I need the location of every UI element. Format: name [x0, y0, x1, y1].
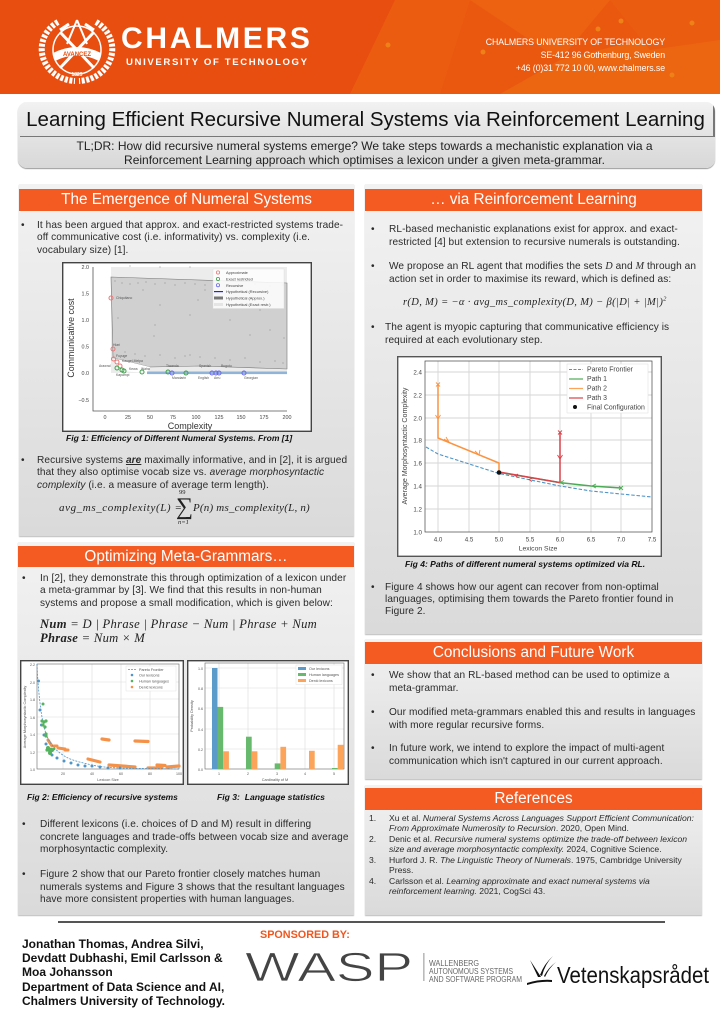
chart: Fig 2 scatter: 2.0	[30, 681, 35, 685]
chart: efficiency of numeral systems: 25	[125, 415, 131, 421]
panel: Conclusions and Future Work	[365, 639, 702, 779]
formula: average ms complexity: n=1	[178, 519, 189, 526]
icon: Chalmers crest: 1829	[71, 72, 83, 78]
text block: meta-grammar: •	[22, 573, 26, 584]
text block: Pareto frontier: Figure 2 show that our Pareto frontier closely matches human	[40, 869, 320, 880]
chart: Fig 4 paths: Average Morphosyntactic Complexity	[401, 387, 409, 504]
text block: trade-off: •	[21, 220, 25, 231]
reference 4: Carlsson et al. Learning approximate and exact numeral systems via	[389, 876, 650, 886]
chart: efficiency of numeral systems: 125	[214, 415, 224, 421]
chart: efficiency of numeral systems: English	[198, 376, 209, 380]
chart: Fig 4 paths: 1.0	[413, 530, 423, 536]
chart: efficiency of numeral systems: 0.5	[82, 344, 89, 350]
formula: average ms complexity: 99	[179, 489, 186, 496]
authors and affiliation: Department of Data Science and AI,	[22, 980, 224, 994]
reference 4: reinforcement learning. 2021, CogSci 43.	[389, 886, 545, 896]
text block: different lexicons: •	[22, 819, 26, 830]
chart: Fig 4 paths: 5.0	[495, 536, 504, 544]
title: Learning Efficient Recursive Numeral Systems via Reinforcement Learning	[26, 108, 705, 131]
chart: efficiency of numeral systems: 50	[147, 415, 153, 421]
chart: efficiency of numeral systems: 100	[192, 415, 200, 421]
text block: Figure 4: •	[371, 582, 375, 593]
chart: Fig 2 scatter: 1.8	[30, 698, 35, 702]
chart: efficiency of numeral systems: Spanish	[199, 364, 211, 368]
chart: Fig 2 scatter: Denić lexicons	[139, 686, 163, 690]
panel: The Emergence of Numeral Systems	[19, 184, 354, 536]
panel: References	[365, 785, 702, 915]
text block: conclusion two: Our modified meta-grammars enabled this and results in languages	[389, 707, 695, 718]
logo wordmark: CHALMERS	[121, 22, 313, 55]
text block: conclusion three: •	[371, 743, 375, 754]
text block: Pareto frontier: •	[22, 869, 26, 880]
chart: Fig 4 paths: 1.8	[413, 438, 423, 444]
reference 1: Xu et al. Numeral Systems Across Languages Support Efficient Communication:	[389, 813, 694, 823]
chart: Fig 2 scatter: 100	[176, 772, 182, 776]
chart: Fig 4 paths: 2.4	[413, 370, 423, 376]
chart: Fig 3 bars: 3	[276, 772, 278, 776]
chart: efficiency of numeral systems: Kewa	[129, 367, 138, 371]
chart: Fig 2 scatter: 1.2	[30, 751, 35, 755]
text block: meta-grammar	[22, 573, 346, 609]
text block: myopic agent: required at each evolutionary step.	[385, 335, 543, 346]
caption: Fig 3: Fig 3: Language statistics	[217, 792, 325, 802]
text block: Figure 4: languages, optimising them towards the Pareto frontier found in	[385, 594, 673, 605]
chart: Fig 3 bars: 0.8	[198, 687, 203, 691]
text block: Pareto frontier: numerals systems and Figure 3 shows that the resultant languages	[40, 882, 345, 892]
chart: efficiency of numeral systems: Hiari	[113, 343, 120, 347]
authors and affiliation: Jonathan Thomas, Andrea Silvi,	[22, 936, 204, 950]
formula: average ms complexity: avg_ms_complexity(L) =	[59, 502, 183, 514]
text block: recursive systems: complexity (i.e. a measure of average term length).	[37, 480, 269, 491]
chart: efficiency of numeral systems: 1.0	[82, 318, 89, 324]
chart: efficiency of numeral systems: Waha	[141, 367, 150, 371]
chart: Fig 3 bars: 1.0	[198, 667, 203, 671]
text block: Figure 4: Figure 2.	[385, 606, 426, 617]
text block: myopic agent	[371, 322, 669, 346]
caption: Fig 4: Fig 4: Paths of different numeral systems optimized via RL.	[405, 559, 645, 569]
authors and affiliation	[22, 936, 225, 1008]
banner pattern	[350, 0, 720, 94]
reference 2: Denic et al. Recursive numeral systems optimize the trade-off between lexicon	[389, 834, 687, 844]
chart: efficiency of numeral systems: Arru	[214, 376, 221, 380]
formula: grammar rules	[40, 617, 317, 645]
chart: Fig 3 bars: Denić lexicons	[309, 679, 333, 683]
text block: RL agent: We propose an RL agent that modifies the sets D and M through an	[389, 261, 696, 272]
chart: Fig 4 paths: Path 2	[587, 386, 607, 392]
contact details: +46 (0)31 772 10 00, www.chalmers.se	[516, 63, 665, 73]
text block: different lexicons: Different lexicons (i.e. choices of D and M) result in differing	[40, 819, 311, 830]
chart: efficiency of numeral systems: 2.0	[82, 265, 89, 271]
text block: different lexicons: morphosyntactic complexity.	[40, 844, 168, 855]
chart: efficiency of numeral systems: Tiwanda	[166, 364, 179, 368]
chart: Fig 4 paths: 4.5	[465, 536, 474, 544]
heading	[365, 642, 702, 664]
title box	[18, 102, 715, 168]
chart: efficiency of numeral systems: Bugotu	[221, 364, 232, 368]
chart: Fig 3 bars: 2	[247, 772, 249, 776]
reference 1: 1.	[369, 813, 376, 823]
text block: meta-grammar: systems and propose a small modification, which is given below:	[40, 598, 333, 609]
chart: Fig 4 paths: 2.0	[413, 416, 423, 422]
heading	[365, 788, 702, 810]
formula: average ms complexity: ∑	[176, 494, 193, 520]
text block: myopic agent: The agent is myopic capturing that communicative efficiency is	[385, 322, 669, 333]
reference 1: From Approximate Numerosity to Recursion. 2020, Open Mind.	[389, 823, 629, 833]
text block: trade-off: It has been argued that approx. and exact-restricted systems trade-	[37, 220, 343, 231]
text block: conclusion one	[371, 670, 670, 694]
reference 3: Hurford J. R. The Linguistic Theory of Numerals. 1975, Cambridge University	[389, 855, 682, 865]
chart: Fig 3 bars: 0.4	[198, 728, 203, 732]
chart: efficiency of numeral systems: Hypothetical (Recursive)	[226, 289, 269, 294]
chart: efficiency of numeral systems: Approximate	[226, 270, 248, 275]
TL;DR summary	[76, 139, 653, 167]
reference 3: 3.	[369, 855, 376, 865]
chart: Fig 4 paths: Pareto Frontier	[587, 366, 634, 374]
heading: References	[494, 790, 573, 807]
formula: average ms complexity	[59, 489, 310, 526]
chart: efficiency of numeral systems: Hypothetical (Exact restr.)	[226, 302, 271, 307]
chart: Fig 4 paths: Lexicon Size	[519, 546, 557, 552]
chart: efficiency of numeral systems: 75	[170, 415, 176, 421]
text block: Pareto frontier	[22, 869, 345, 905]
reference 4	[369, 876, 650, 896]
text block: RL agent	[371, 261, 696, 285]
chart: efficiency of numeral systems: Georgian	[244, 376, 258, 380]
chart: efficiency of numeral systems: Exact restricted	[226, 276, 253, 282]
chart: efficiency of numeral systems: Mandarin	[172, 376, 186, 380]
chart: efficiency of numeral systems: Kaugel-Melpa	[122, 359, 143, 363]
text block: conclusion one: We show that an RL-based method can be used to optimize a	[389, 670, 669, 681]
chart: Fig 2 scatter: Average Morphosyntactic Complexity	[23, 686, 27, 748]
chart: efficiency of numeral systems: Recursive	[226, 283, 243, 288]
chart: efficiency of numeral systems: Kapampi	[116, 373, 130, 377]
chart: efficiency of numeral systems: 1.5	[82, 292, 89, 298]
authors and affiliation: Devdatt Dubhashi, Emil Carlsson &	[22, 951, 223, 965]
caption: Fig 2: Fig 2: Efficiency of recursive systems	[27, 792, 178, 802]
reference 2	[369, 834, 687, 854]
chart: Fig 3 bars: Cardinality of M	[262, 778, 288, 782]
header banner	[0, 0, 720, 94]
text block: RL explanations: restricted [4] but extension to recursive numerals is outstanding.	[389, 236, 680, 248]
contact details: CHALMERS UNIVERSITY OF TECHNOLOGY	[486, 37, 665, 47]
text block: different lexicons	[22, 819, 349, 855]
reference 4: 4.	[369, 876, 376, 886]
chart: Fig 4 paths: 4.0	[434, 536, 443, 544]
chart: Fig 3 bars: 4	[304, 772, 306, 776]
text block: Figure 4	[371, 582, 673, 617]
formula: grammar rules: Num = D | Phrase | Phrase − Num | Phrase + Num	[40, 617, 317, 631]
text block: RL agent: action set in order to maximise its reward, which is defined as:	[389, 274, 671, 285]
text block: meta-grammar: In [2], they demonstrate this through optimization of a lexicon under	[40, 573, 346, 584]
chart: efficiency of numeral systems: Hypothetical (Approx.)	[226, 296, 265, 300]
chart: efficiency of numeral systems: Communicative cost	[66, 298, 76, 378]
chart: Fig 2 scatter: Lexicon Size	[97, 778, 119, 782]
text block: trade-off	[21, 220, 343, 256]
contact details: SE-412 96 Gothenburg, Sweden	[541, 50, 665, 60]
chart: efficiency of numeral systems: Complexity	[168, 421, 213, 431]
chart: efficiency of numeral systems: 150	[236, 415, 246, 421]
logo wordmark: UNIVERSITY OF TECHNOLOGY	[126, 57, 309, 68]
chart: Fig 4 paths: 1.4	[413, 484, 423, 490]
formula: reward: r(D, M) = −α · avg_ms_complexity(D, M) − β(|D| + |M|)2	[403, 296, 667, 308]
text block: conclusion two: •	[371, 707, 375, 718]
heading: Optimizing Meta-Grammars…	[84, 548, 288, 565]
text block: myopic agent: •	[371, 322, 375, 333]
reference 3: Press.	[389, 865, 413, 875]
chart: Fig 4 paths: 1.2	[413, 506, 423, 514]
text block: Figure 4: Figure 4 shows how our agent can recover from non-optimal	[385, 582, 659, 593]
chart: Fig 4 paths: 1.6	[413, 460, 423, 468]
chart: efficiency of numeral systems: 175	[260, 415, 268, 421]
text block: recursive systems: Recursive systems are maximally informative, and in [2], it is argued	[37, 455, 347, 466]
chart: Fig 4 paths: Final Configuration	[587, 404, 645, 412]
text block: trade-off: vocabulary size) [1].	[37, 245, 128, 256]
logo: WASP	[245, 948, 522, 986]
text block: Pareto frontier: have more consistent properties with human languages.	[40, 894, 294, 905]
chart: Fig 2 scatter: Pareto Frontier	[139, 668, 164, 672]
heading: … via Reinforcement Learning	[430, 191, 637, 208]
reference 2: size and average morphosyntactic complexity. 2024, Cognitive Science.	[389, 844, 662, 854]
chart: Fig 4 paths: 7.0	[617, 536, 626, 544]
text block: conclusion one: meta-grammar.	[389, 683, 458, 694]
logo: WASP: WALLENBERG	[429, 958, 479, 968]
chart: Fig 3 bars: 0.6	[198, 707, 203, 711]
chart: Fig 3 bars: 5	[333, 772, 335, 776]
caption: Fig 1: Fig 1: Efficiency of Different Numeral Systems. From [1]	[66, 433, 292, 443]
text block: different lexicons: concrete languages and trade-offs between vocab size and average	[40, 832, 349, 842]
chart: Fig 4 paths: 6.5	[587, 536, 596, 544]
authors and affiliation: Moa Johansson	[22, 965, 113, 979]
text block: meta-grammar: a meta-grammar by [3]. We find that this results in non-human	[40, 585, 322, 596]
chart: Fig 2 scatter: 1.0	[30, 768, 35, 772]
TL;DR summary: Reinforcement Learning approach which optimises a lexicon under a given meta-grammar.	[124, 153, 605, 167]
chart: Fig 2 scatter: Our lexicons	[139, 674, 160, 678]
chart: efficiency of numeral systems: 0.0	[82, 371, 89, 377]
formula: average ms complexity: P(n) ms_complexity(L, n)	[193, 502, 310, 514]
chart: efficiency of numeral systems: −0.5	[78, 398, 89, 404]
chart: efficiency of numeral systems: 0	[104, 415, 106, 421]
heading	[19, 189, 354, 211]
text block: recursive systems	[21, 455, 347, 491]
chart: Fig 2 scatter: 40	[90, 772, 94, 776]
chart: Fig 3 bars	[187, 660, 349, 785]
text block: RL explanations: •	[371, 224, 375, 235]
chart: Fig 2 scatter: 20	[61, 772, 65, 776]
chart: Fig 4 paths: Path 1	[587, 376, 607, 383]
logo: Vetenskapsradet	[527, 956, 710, 988]
chart: efficiency of numeral systems: Arawral	[99, 364, 111, 368]
text block: RL agent: •	[371, 261, 375, 272]
formula: grammar rules: Phrase = Num × M	[40, 631, 145, 645]
chart: Fig 3 bars: Our lexicons	[309, 667, 330, 671]
chart: Fig 4 paths: 7.5	[648, 536, 657, 544]
chart: Fig 3 bars: 0.0	[198, 768, 203, 772]
panel: via Reinforcement Learning	[365, 184, 702, 634]
text block: recursive systems: •	[21, 455, 25, 466]
chart: Fig 3 bars: Probability Density	[190, 700, 194, 732]
panel: Optimizing Meta-Grammars	[18, 542, 354, 915]
chart: Fig 4 paths: 6.0	[556, 536, 565, 544]
text block: conclusion two: with more regular recursive forms.	[389, 720, 544, 731]
icon: Chalmers crest	[38, 19, 116, 84]
title	[18, 102, 713, 136]
text block: trade-off: off communicative cost (i.e. informativity) vs. complexity (i.e.	[37, 232, 310, 243]
chart: Fig 3 bars: 1	[218, 772, 220, 776]
chart: Fig 3 bars: Human languages	[309, 673, 339, 677]
chart: Fig 2 scatter: 60	[119, 772, 123, 776]
chart: Fig 4 paths	[397, 356, 662, 557]
chart: Fig 4 paths: Path 3	[587, 395, 607, 402]
chart: efficiency of numeral systems	[62, 262, 312, 432]
contact details	[486, 37, 665, 73]
text block: RL explanations	[371, 224, 680, 248]
text block: conclusion two	[371, 707, 695, 731]
text block: conclusion three: communication which isn't captured in our current approach.	[389, 756, 663, 767]
reference 3	[369, 855, 682, 875]
chart: Fig 2 scatter: 2.2	[30, 663, 35, 667]
TL;DR summary: TL;DR: How did recursive numeral systems emerge? We take steps towards a mechanistic explanation via a	[76, 139, 653, 153]
authors and affiliation: Chalmers University of Technology.	[22, 994, 225, 1008]
chart: Fig 3 bars: 0.2	[198, 748, 203, 752]
text block: conclusion three	[371, 743, 664, 767]
text block: recursive systems: that they also optimise vocab size vs. average morphosyntactic	[37, 467, 324, 478]
sponsored by label: SPONSORED BY:	[260, 929, 350, 941]
text block: RL explanations: RL-based mechanistic explanations exist for approx. and exact-	[389, 224, 678, 235]
chart: Fig 2 scatter: Human languages	[139, 680, 169, 684]
reference 1	[369, 813, 694, 833]
heading	[18, 546, 354, 567]
chart: Fig 2 scatter: 1.6	[30, 716, 35, 720]
chart: Fig 2 scatter	[20, 660, 184, 785]
icon: Chalmers crest: AVANCEZ	[63, 52, 91, 58]
chart: Fig 4 paths: 2.2	[413, 392, 423, 400]
chart: efficiency of numeral systems: Fuyuge	[116, 354, 127, 358]
heading: The Emergence of Numeral Systems	[61, 191, 312, 208]
text block: conclusion three: In future work, we intend to explore the impact of multi-agent	[389, 743, 664, 754]
chart: Fig 4 paths: 5.5	[526, 536, 535, 544]
chart: Fig 2 scatter: 1.4	[30, 733, 35, 737]
chart: efficiency of numeral systems: 200	[282, 415, 292, 421]
reference 2: 2.	[369, 834, 376, 844]
text block: conclusion one: •	[371, 670, 375, 681]
heading	[365, 189, 702, 211]
chart: Fig 2 scatter: 80	[148, 772, 152, 776]
heading: Conclusions and Future Work	[433, 644, 634, 661]
chart: efficiency of numeral systems: Chiquitano	[116, 296, 132, 300]
